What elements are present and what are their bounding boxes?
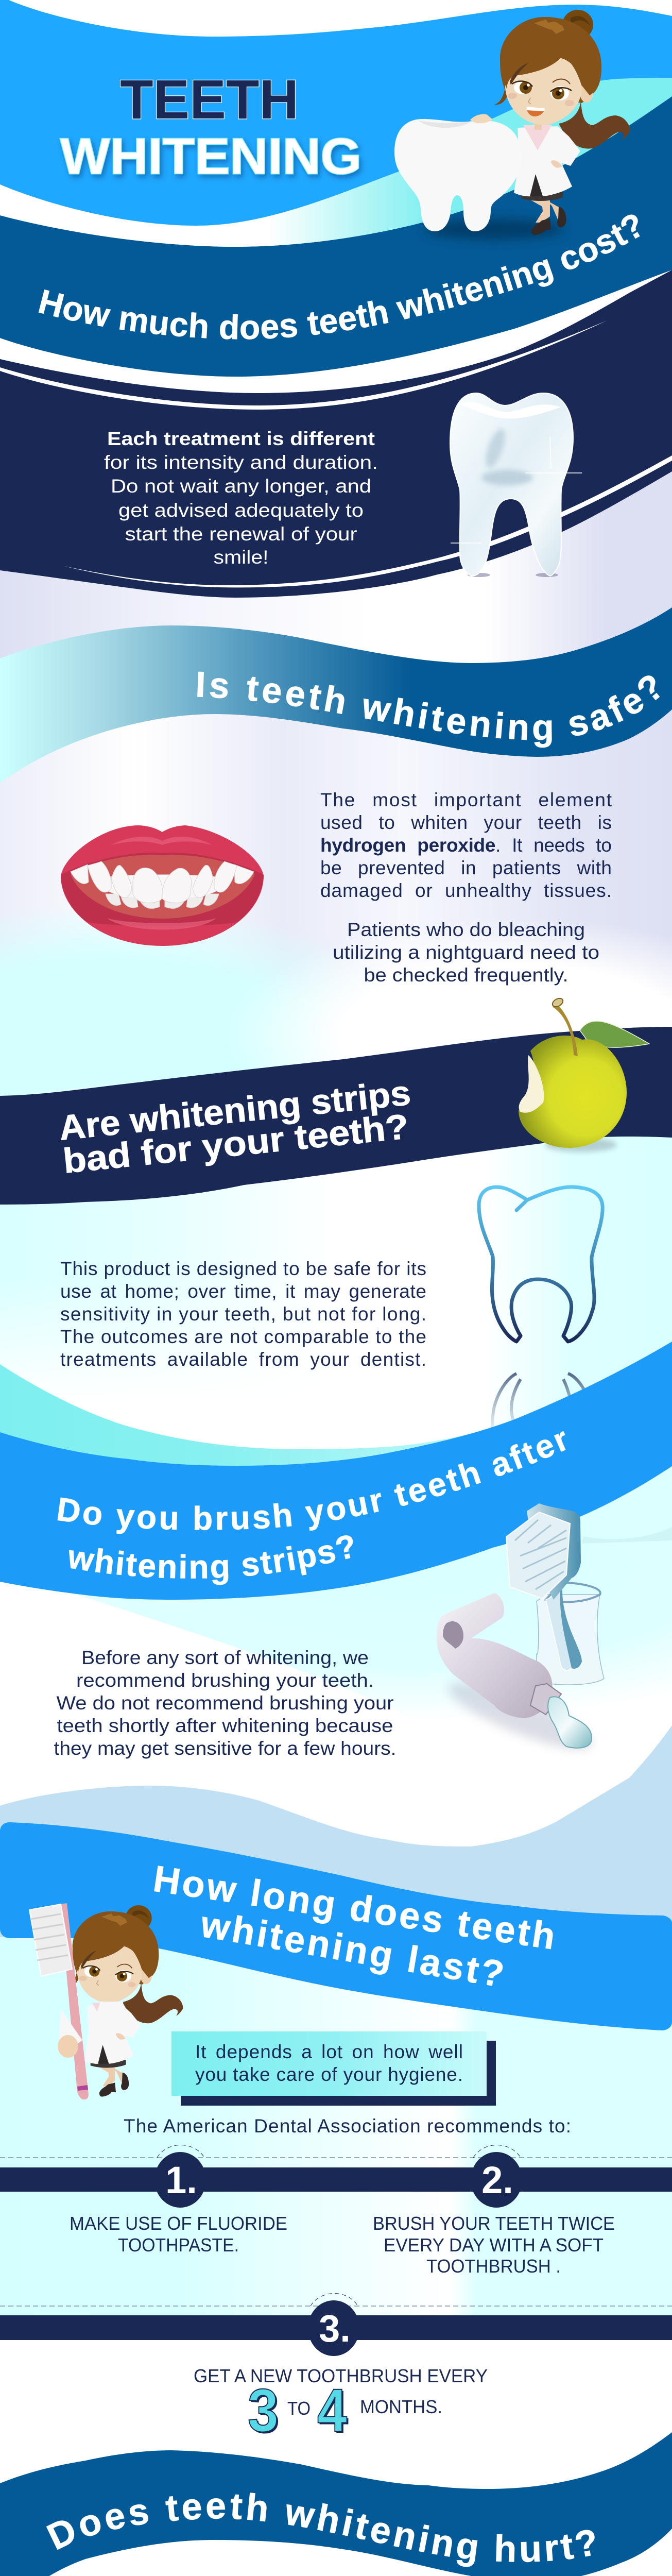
panel: brush after whitening strips [0, 1342, 672, 1759]
text: brush before whitening: they may get sensitive for a few hours. [54, 1738, 397, 1759]
callout: hygiene [171, 2031, 496, 2106]
text: each treatment is different: start the renewal of your [125, 523, 357, 545]
text: each treatment is different [104, 428, 378, 568]
white ribbon [0, 270, 672, 393]
panel: hero header [0, 0, 672, 392]
step 2 text: EVERY DAY WITH A SOFT [384, 2234, 604, 2256]
icon: outlined tooth [479, 1187, 602, 1448]
light blue wave [0, 1725, 672, 1958]
tube [442, 1670, 598, 1761]
icon: dentist woman leaning on tooth [394, 10, 630, 240]
text: strips safe for home use: The outcomes are not comparable to the [60, 1326, 426, 1347]
upper teeth [71, 861, 254, 903]
heading: How long does teeth whitening last?: How long does teeth [151, 1858, 558, 1957]
step 1 badge [154, 2145, 206, 2208]
dark blue wave [0, 96, 672, 392]
text: each treatment is different: for its intensity and duration. [104, 452, 378, 473]
step 3 text: GET A NEW TOOTHBRUSH EVERY [194, 2365, 488, 2386]
step 2 text: BRUSH YOUR TEETH TWICE [373, 2213, 615, 2234]
lower teeth [106, 894, 219, 908]
step 1 text [70, 2213, 287, 2256]
cyan wedge [0, 1364, 514, 1468]
light cyan background [0, 1937, 672, 2318]
text: strips safe for home use: treatments available from your dentist. [60, 1349, 426, 1370]
text: brush before whitening: We do not recommend brushing your [57, 1692, 393, 1714]
section background [0, 685, 672, 1113]
text: brush before whitening: Before any sort of whitening, we [81, 1647, 369, 1668]
step 3 text: 4 [317, 2377, 347, 2445]
heading: Is teeth whitening safe?: Is teeth whitening safe? [197, 672, 660, 748]
text: each treatment is different: Each treatment is different [107, 428, 375, 449]
icon: bitten green apple [519, 996, 649, 1152]
step 3 badge: 3. [319, 2307, 351, 2350]
icon: toothbrush in glass and toothpaste tube [436, 1503, 604, 1761]
text: hydrogen peroxide: The most important element [320, 789, 612, 810]
heading: Are whitening strips bad for your teeth?: bad for your teeth? [61, 1107, 410, 1181]
title: TEETH [120, 68, 299, 130]
text: hydrogen peroxide: hydrogen peroxide. It needs to [320, 835, 612, 856]
heading: How long does teeth whitening last?: whitening last? [197, 1904, 507, 1995]
step bars [0, 2158, 672, 2340]
blue ribbon [0, 1342, 672, 1600]
step 2 badge: 2. [481, 2159, 513, 2201]
brush head [527, 1503, 581, 1600]
panel: does whitening hurt [0, 2432, 672, 2576]
step 3 text: TO [287, 2398, 311, 2419]
heading: Do you brush your teeth after whitening strips?: whitening strips? [69, 1535, 353, 1585]
paste blob [548, 1697, 592, 1748]
heading: Does teeth whitening hurt?: Does teeth whitening hurt? [46, 2493, 595, 2567]
text: hydrogen peroxide: used to whiten your teeth is [320, 812, 612, 833]
glass [537, 1595, 604, 1685]
blue wave [0, 0, 672, 237]
navy wave [0, 270, 672, 598]
text: brush before whitening [54, 1647, 397, 1759]
white to cyan ribbon [0, 78, 672, 247]
heading: Do you brush your teeth after whitening strips?: Do you brush your teeth after [58, 1431, 565, 1534]
text: brush before whitening: recommend brushing your teeth. [76, 1670, 374, 1691]
title: WHITENING [60, 128, 361, 184]
text: strips safe for home use: sensitivity in your teeth, but not for long. [60, 1303, 426, 1325]
text: brush before whitening: teeth shortly after whitening because [57, 1715, 393, 1736]
lavender backdrop [0, 453, 672, 685]
step 3 text [194, 2365, 488, 2446]
step 1 text: TOOTHPASTE. [118, 2234, 239, 2256]
text: hydrogen peroxide: be prevented in patients with [320, 857, 612, 878]
section background [0, 1027, 672, 1437]
heading: Are whitening strips bad for your teeth? [57, 1073, 412, 1181]
navy band [0, 1027, 672, 1205]
step 1 badge: 1. [165, 2159, 197, 2201]
text: each treatment is different: Do not wait any longer, and [111, 476, 371, 497]
callout: hygiene: It depends a lot on how well [195, 2041, 463, 2062]
panel: treatment cost [0, 270, 672, 685]
text: strips safe for home use: use at home; over time, it may generate [60, 1281, 426, 1302]
icon: dentist woman with toothbrush [29, 1903, 183, 2099]
text: each treatment is different: get advised adequately to [118, 500, 364, 521]
section background [0, 1525, 672, 1793]
text: strips safe for home use: This product is designed to be safe for its [60, 1258, 426, 1279]
icon: glossy tooth [450, 393, 582, 577]
title [60, 68, 361, 184]
text: hydrogen peroxide: utilizing a nightguard need to [333, 942, 599, 963]
icon: smiling lips [61, 825, 264, 946]
step 3 text: MONTHS. [360, 2396, 442, 2417]
heading: How much does teeth whitening cost?: How much does teeth whitening cost? [38, 214, 640, 340]
step 2 text: TOOTHBRUSH . [426, 2256, 561, 2277]
dark blue wave with gradient [0, 607, 672, 783]
step 3 text: 3 [249, 2378, 280, 2446]
step 2 badge [471, 2145, 522, 2208]
step 2 text [373, 2213, 615, 2277]
text: strips safe for home use [60, 1258, 426, 1370]
brush handle [546, 1592, 572, 1670]
panel: how long does whitening last [0, 1725, 672, 2446]
text: hydrogen peroxide [320, 789, 612, 986]
step 1 text: MAKE USE OF FLUORIDE [70, 2213, 287, 2234]
text: hydrogen peroxide: damaged or unhealthy tissues. [320, 880, 612, 901]
step 3 text: 4 [319, 2378, 349, 2446]
dark blue wave [0, 2432, 672, 2576]
panel: are whitening strips bad [0, 996, 672, 1453]
text: hydrogen peroxide: Patients who do bleaching [347, 919, 585, 940]
text: hydrogen peroxide: be checked frequently. [364, 964, 568, 986]
heading: Do you brush your teeth after whitening strips? [58, 1431, 565, 1585]
panel: is teeth whitening safe [0, 607, 672, 1096]
text: each treatment is different: smile! [213, 547, 269, 568]
text: ADA recommends: The American Dental Association recommends to: [124, 2115, 571, 2137]
callout: hygiene: you take care of your hygiene. [195, 2064, 463, 2085]
blue ribbon [0, 1822, 672, 2030]
step 3 badge [308, 2293, 359, 2356]
heading: Are whitening strips bad for your teeth?: Are whitening strips [57, 1073, 412, 1148]
step 3 text: 3 [248, 2377, 279, 2445]
